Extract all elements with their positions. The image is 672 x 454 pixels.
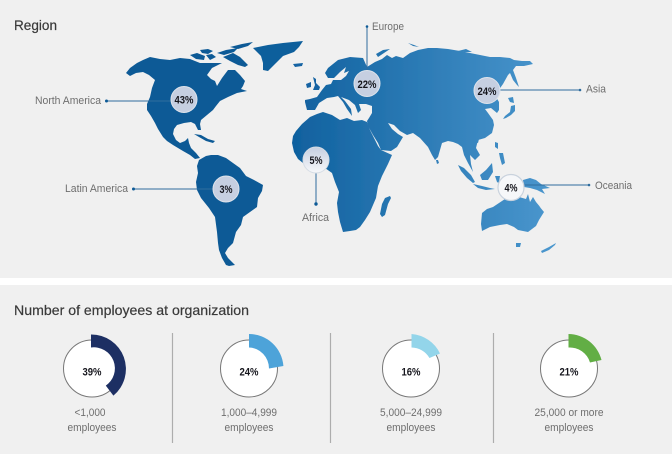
callout: Asia	[474, 78, 607, 104]
callout: North America: North America	[35, 95, 102, 107]
callout: Oceania: Oceania	[595, 180, 633, 192]
map: Iceland, UK	[293, 63, 320, 90]
map: South America	[196, 155, 263, 266]
callout: Asia: Asia	[586, 84, 607, 96]
map: Arctic Russia islands	[376, 43, 472, 57]
donut: 25,000 or more: 21%	[560, 366, 579, 378]
donut: under 1,000: employees	[68, 422, 117, 434]
donut: 25,000 or more	[534, 334, 604, 434]
callout: Oceania	[498, 174, 633, 200]
callout: Europe	[354, 21, 404, 96]
callout: Africa: Africa	[302, 212, 330, 224]
map: Australia	[481, 194, 544, 232]
donut: 5,000 to 24,999: 16%	[402, 366, 421, 378]
map: Greenland	[253, 41, 303, 71]
donut: 25,000 or more: employees	[544, 422, 594, 434]
map: Africa	[292, 112, 392, 232]
callout: Latin America: 3%	[220, 184, 233, 196]
map: Southeast Asia islands	[458, 163, 503, 190]
callout: Europe: Europe	[372, 21, 404, 33]
donut: under 1,000: <1,000	[74, 407, 106, 419]
callout: Oceania: 4%	[504, 182, 518, 194]
donut: 25,000 or more: 25,000 or more	[534, 407, 604, 419]
world map	[126, 41, 556, 266]
donut: 1,000 to 4,999: employees	[224, 422, 274, 434]
map: Japan	[503, 97, 515, 119]
map: Sri Lanka, Hainan, Philippines	[436, 139, 505, 165]
callout: Africa: 5%	[310, 155, 323, 167]
heading: employees: Number of employees at organization	[14, 302, 249, 318]
map: Eurasia	[305, 48, 533, 172]
map: North America	[126, 57, 247, 159]
donut: under 1,000: 39%	[82, 366, 102, 378]
donut: 1,000 to 4,999: 24%	[240, 366, 259, 378]
divider band	[0, 278, 672, 285]
callout: Europe: 22%	[358, 79, 377, 91]
map: Arctic islands	[190, 42, 253, 67]
donut: 5,000 to 24,999: employees	[386, 422, 436, 434]
donut: 5,000 to 24,999	[380, 334, 442, 434]
panel: employees	[0, 285, 672, 454]
panel: region	[0, 0, 672, 278]
callout: North America: 43%	[174, 94, 194, 106]
heading: region: Region	[14, 17, 57, 33]
map: Tasmania and NZ	[516, 243, 556, 253]
donut: 1,000 to 4,999: 1,000–4,999	[221, 407, 277, 419]
donut: 1,000 to 4,999	[220, 334, 283, 434]
callout: Asia: 24%	[478, 86, 497, 98]
callout: Latin America	[65, 176, 239, 202]
callout: North America	[35, 86, 197, 112]
map: Madagascar	[380, 196, 391, 217]
map: Caribbean	[194, 134, 215, 143]
callout: Africa	[302, 147, 330, 224]
donut: 5,000 to 24,999: 5,000–24,999	[380, 407, 442, 419]
donut: under 1,000	[64, 334, 126, 434]
map: New Guinea	[523, 178, 550, 194]
separators	[172, 333, 494, 443]
callout: Latin America: Latin America	[65, 183, 129, 195]
